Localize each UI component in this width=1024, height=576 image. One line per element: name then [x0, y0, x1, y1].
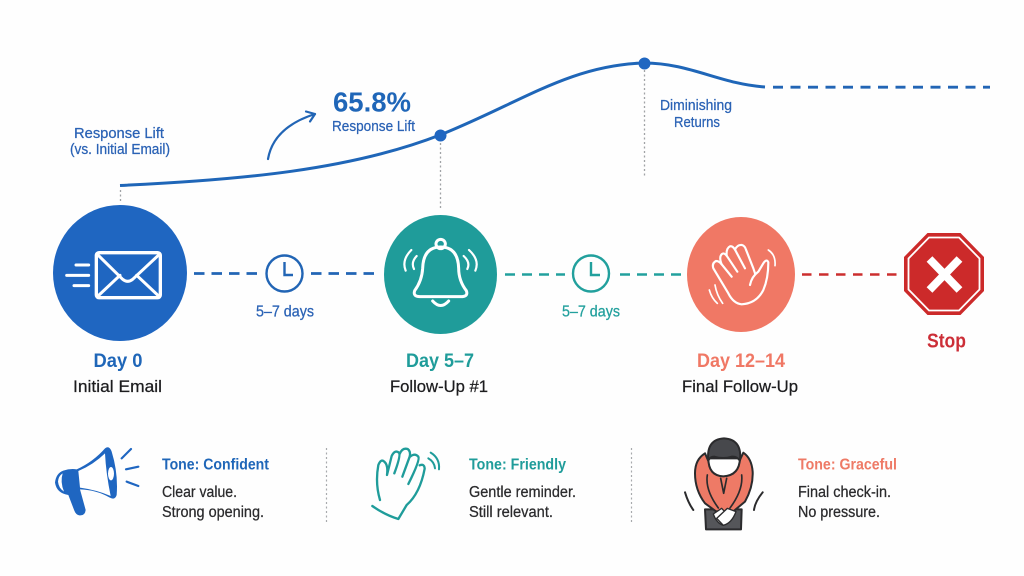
step: stop sign: Stop	[927, 330, 966, 352]
callout: diminishing returns: Returns	[674, 115, 720, 131]
icon: waving hand	[709, 245, 775, 304]
icon: ringing bell	[404, 239, 477, 305]
tone: graceful: Final check-in.	[798, 484, 891, 501]
icon: bowing person	[685, 438, 763, 529]
icon: x mark	[930, 259, 960, 290]
callout: 65.8% response lift	[332, 86, 416, 135]
connector: final follow-up to stop	[802, 273, 897, 276]
step: day 0 initial email: Day 0	[94, 350, 143, 372]
icon: envelope	[67, 253, 160, 298]
tone: friendly: Gentle reminder.	[469, 484, 576, 501]
callout: diminishing returns	[660, 98, 732, 131]
chart axis label: Response Lift	[74, 126, 164, 142]
connector: day 0 to follow-up 1	[194, 256, 377, 320]
chart axis label: (vs. Initial Email)	[70, 142, 170, 158]
step: day 5-7 follow-up: Day 5–7	[406, 350, 474, 372]
connector: follow-up 1 to final follow-up	[505, 256, 681, 320]
step: day 5-7 follow-up: Follow-Up #1	[390, 377, 488, 396]
callout: 65.8% response lift: 65.8%	[333, 86, 411, 118]
arrow: rising lift	[268, 112, 315, 159]
tone: confident	[55, 447, 269, 521]
tone: friendly	[372, 449, 576, 521]
tone: graceful: Tone: Graceful	[798, 456, 897, 474]
step: day 12-14 final follow-up: Final Follow-Up	[682, 377, 798, 396]
connector: day 0 to follow-up 1: 5–7 days	[256, 304, 314, 320]
tone: confident: Tone: Confident	[162, 456, 269, 474]
step: stop sign	[904, 233, 984, 352]
icon: megaphone	[55, 447, 138, 515]
step: day 12-14 final follow-up	[682, 217, 798, 396]
tone: graceful	[685, 438, 897, 529]
tone: friendly: Still relevant.	[469, 504, 553, 521]
chart axis label	[70, 126, 170, 158]
tone: confident: Strong opening.	[162, 504, 264, 521]
step: day 0 initial email: Initial Email	[73, 377, 162, 396]
chart: response lift curve	[120, 58, 990, 210]
tone: graceful: No pressure.	[798, 504, 880, 521]
step: day 0 initial email	[53, 205, 187, 396]
callout: 65.8% response lift: Response Lift	[332, 118, 416, 135]
connector: follow-up 1 to final follow-up: 5–7 days	[562, 304, 620, 320]
tone: friendly: Tone: Friendly	[469, 456, 566, 474]
step: day 5-7 follow-up	[384, 215, 497, 396]
step: day 12-14 final follow-up: Day 12–14	[697, 350, 785, 372]
tone: confident: Clear value.	[162, 484, 237, 501]
icon: open hand	[372, 449, 439, 519]
callout: diminishing returns: Diminishing	[660, 98, 732, 114]
